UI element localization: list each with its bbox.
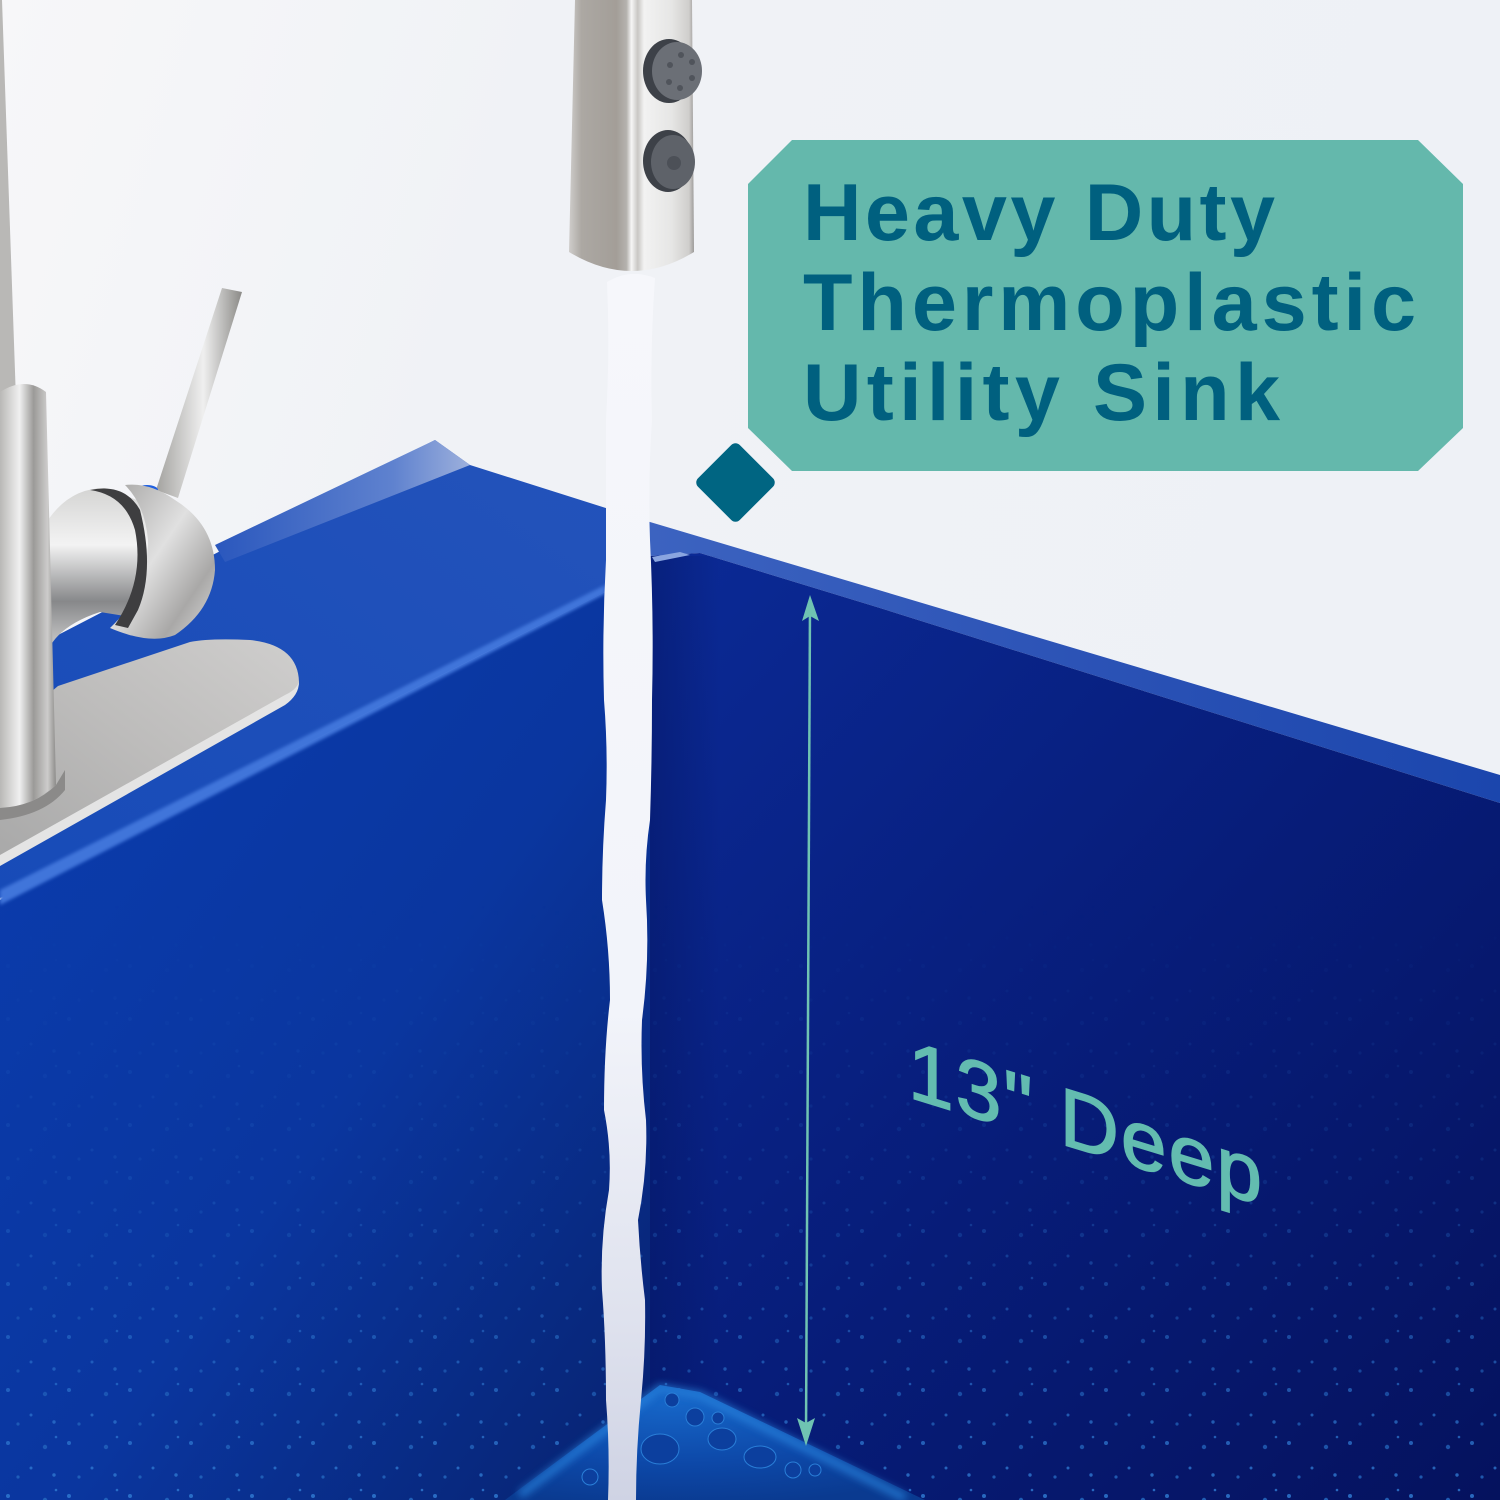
spray button bottom (643, 130, 695, 192)
faucet (0, 0, 299, 866)
column (0, 384, 56, 808)
sink basin (0, 440, 1500, 1500)
depth label: 13" Deep (908, 1023, 1262, 1223)
right inner wall (650, 553, 1500, 1500)
spray head (569, 0, 702, 271)
faucet arm (48, 488, 150, 650)
water stream (602, 274, 655, 1500)
banner heading (803, 168, 1416, 438)
banner heading: Heavy Duty (803, 168, 1275, 258)
sink deck top (0, 440, 650, 898)
callout banner (748, 140, 1463, 471)
basin floor (505, 1385, 925, 1500)
depth arrow (797, 595, 819, 1446)
handle collar (110, 485, 215, 639)
column base ring (0, 770, 65, 820)
banner shape (748, 140, 1463, 471)
right rim (650, 522, 1500, 803)
blue indicator (136, 485, 158, 495)
spout tube (0, 0, 16, 400)
banner heading: Utility Sink (803, 348, 1281, 438)
diamond marker (694, 441, 777, 524)
spray button top (643, 39, 702, 103)
lever handle (156, 288, 242, 498)
spray head body (569, 0, 694, 271)
banner heading: Thermoplastic (803, 258, 1416, 348)
water droplets on walls (6, 1019, 1496, 1500)
deck back splash lip (215, 440, 470, 562)
left inner wall (0, 556, 650, 1500)
front rim highlight (0, 585, 605, 905)
floor ridge glow (520, 1388, 905, 1498)
deck plate (0, 639, 299, 865)
floor droplets (582, 1393, 821, 1485)
corner rim highlight (652, 552, 690, 562)
